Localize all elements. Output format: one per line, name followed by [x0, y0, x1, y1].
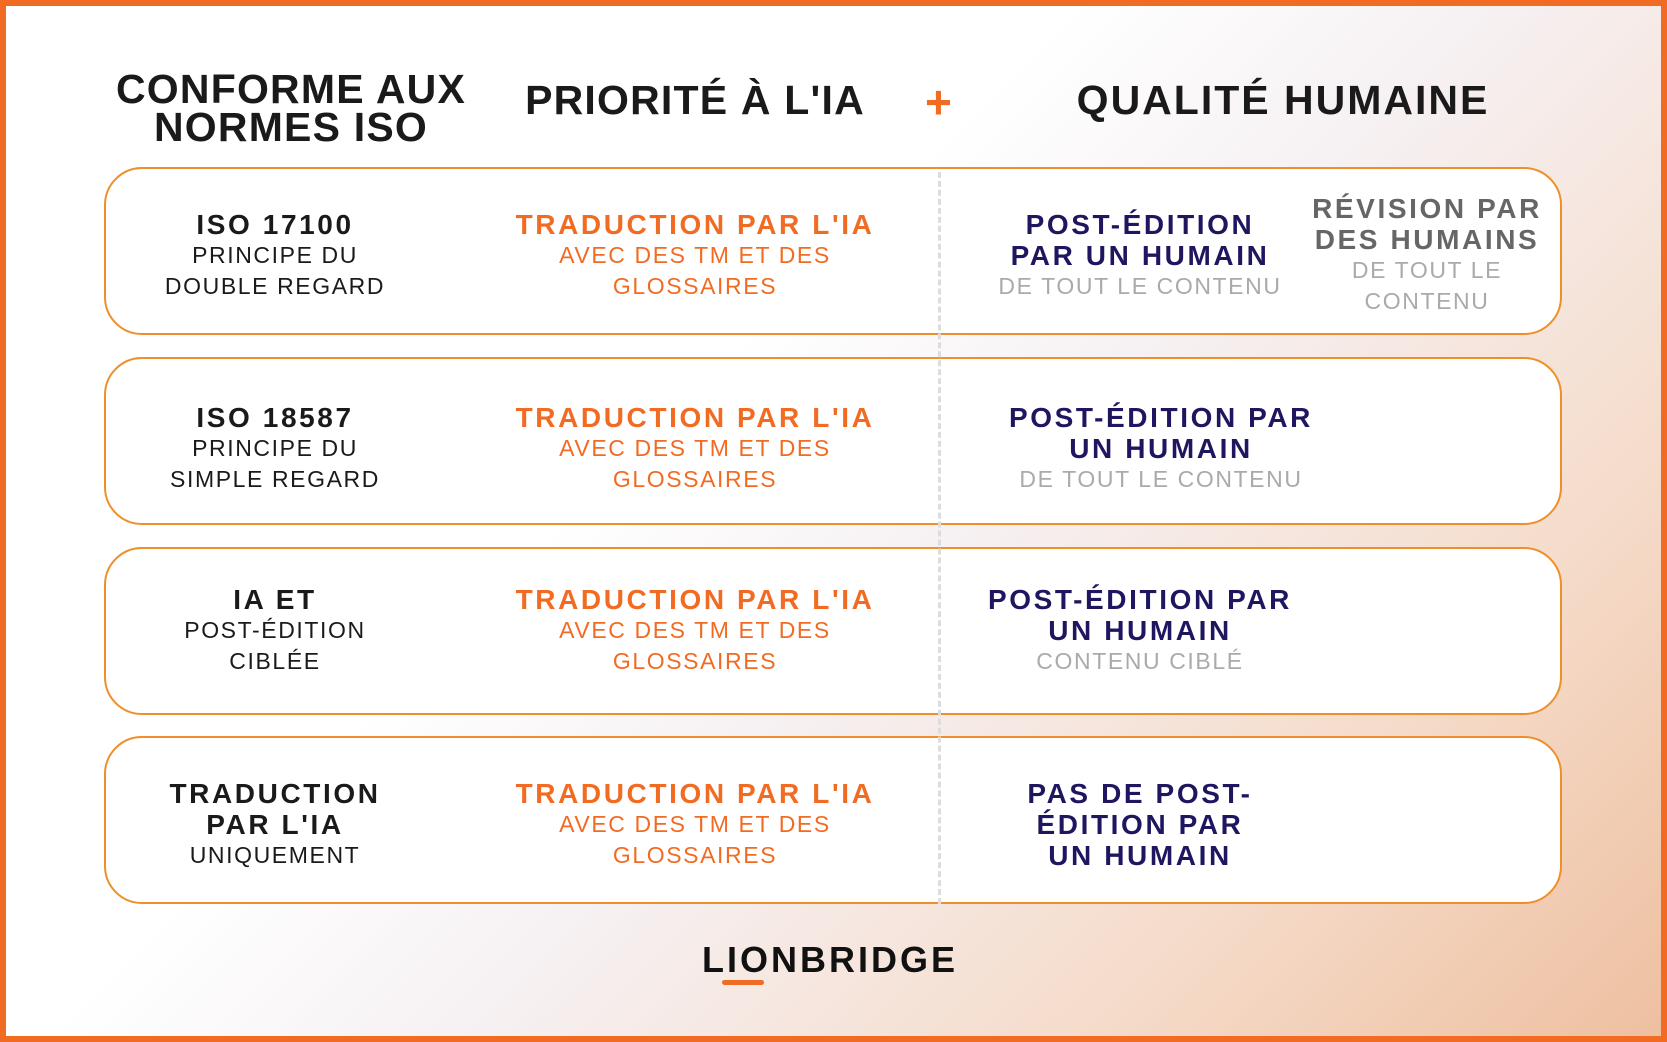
text: traduction par l'IA uniquement: UNIQUEMENT: [190, 842, 360, 868]
heading: conforme aux normes ISO: CONFORME AUX: [116, 66, 466, 112]
text: post-édition row 3: [988, 584, 1292, 674]
heading: conforme aux normes ISO: [116, 66, 466, 150]
text: traduction row 1: TRADUCTION PAR L'IA: [516, 209, 874, 240]
text: post-édition row 3: CONTENU CIBLÉ: [1036, 648, 1244, 674]
text: post-édition row 2: DE TOUT LE CONTENU: [1019, 466, 1303, 492]
text: traduction row 4: GLOSSAIRES: [613, 842, 777, 868]
heading: conforme aux normes ISO: NORMES ISO: [154, 104, 428, 150]
text: révision par des humains: DE TOUT LE: [1352, 257, 1502, 283]
text: traduction row 4: TRADUCTION PAR L'IA: [516, 778, 874, 809]
text: traduction row 1: [516, 209, 874, 299]
text: ISO 17100: ISO 17100: [196, 209, 354, 240]
text: révision par des humains: CONTENU: [1365, 288, 1489, 314]
text: traduction par l'IA uniquement: [169, 778, 381, 868]
text: traduction par l'IA uniquement: TRADUCTION: [169, 778, 381, 809]
text: traduction row 3: TRADUCTION PAR L'IA: [516, 584, 874, 615]
text: ISO 18587: ISO 18587: [196, 402, 354, 433]
text: ISO 17100: [165, 209, 385, 299]
text: révision par des humains: DES HUMAINS: [1315, 224, 1539, 255]
text: traduction par l'IA uniquement: PAR L'IA: [206, 809, 344, 840]
heading: qualité humaine: QUALITÉ HUMAINE: [1077, 77, 1489, 123]
text: ISO 18587: [170, 402, 380, 492]
text: post-édition row 1: [998, 209, 1282, 299]
text: traduction row 1: GLOSSAIRES: [613, 273, 777, 299]
text: post-édition row 3: UN HUMAIN: [1048, 615, 1232, 646]
text: pas de post-édition: ÉDITION PAR: [1036, 809, 1243, 840]
text: traduction row 2: [516, 402, 874, 492]
text: traduction row 3: AVEC DES TM ET DES: [559, 617, 831, 643]
text: post-édition row 1: DE TOUT LE CONTENU: [998, 273, 1282, 299]
text: ISO 18587: PRINCIPE DU: [192, 435, 358, 461]
text: traduction row 4: AVEC DES TM ET DES: [559, 811, 831, 837]
logo: Lionbridge: LIONBRIDGE: [702, 939, 958, 980]
text: IA et post-édition ciblée: [184, 584, 366, 674]
text: traduction row 2: AVEC DES TM ET DES: [559, 435, 831, 461]
text: post-édition row 2: UN HUMAIN: [1069, 433, 1253, 464]
text: post-édition row 2: POST-ÉDITION PAR: [1009, 402, 1313, 433]
text: IA et post-édition ciblée: CIBLÉE: [229, 648, 321, 674]
text: pas de post-édition: PAS DE POST-: [1027, 778, 1253, 809]
icon: plus: +: [925, 76, 953, 128]
text: pas de post-édition: UN HUMAIN: [1048, 840, 1232, 871]
panel: row 3: [104, 547, 1562, 715]
text: post-édition row 2: [1009, 402, 1313, 492]
text: post-édition row 1: PAR UN HUMAIN: [1011, 240, 1269, 271]
text: IA et post-édition ciblée: IA ET: [233, 584, 317, 615]
text: ISO 17100: DOUBLE REGARD: [165, 273, 385, 299]
text: post-édition row 1: POST-ÉDITION: [1026, 209, 1254, 240]
text: traduction row 4: [516, 778, 874, 868]
text: traduction row 1: AVEC DES TM ET DES: [559, 242, 831, 268]
text: révision par des humains: RÉVISION PAR: [1312, 193, 1542, 224]
panel: row 1: [104, 167, 1562, 335]
text: traduction row 3: GLOSSAIRES: [613, 648, 777, 674]
panel: row 4: [104, 736, 1562, 904]
text: post-édition row 3: POST-ÉDITION PAR: [988, 584, 1292, 615]
text: IA et post-édition ciblée: POST-ÉDITION: [184, 617, 366, 643]
text: traduction row 3: [516, 584, 874, 674]
text: traduction row 2: TRADUCTION PAR L'IA: [516, 402, 874, 433]
heading: priorité à l'IA: PRIORITÉ À L'IA: [525, 77, 865, 123]
text: traduction row 2: GLOSSAIRES: [613, 466, 777, 492]
text: ISO 18587: SIMPLE REGARD: [170, 466, 380, 492]
text: révision par des humains: [1312, 193, 1542, 314]
panel: row 2: [104, 357, 1562, 525]
text: pas de post-édition: [1027, 778, 1253, 871]
text: ISO 17100: PRINCIPE DU: [192, 242, 358, 268]
